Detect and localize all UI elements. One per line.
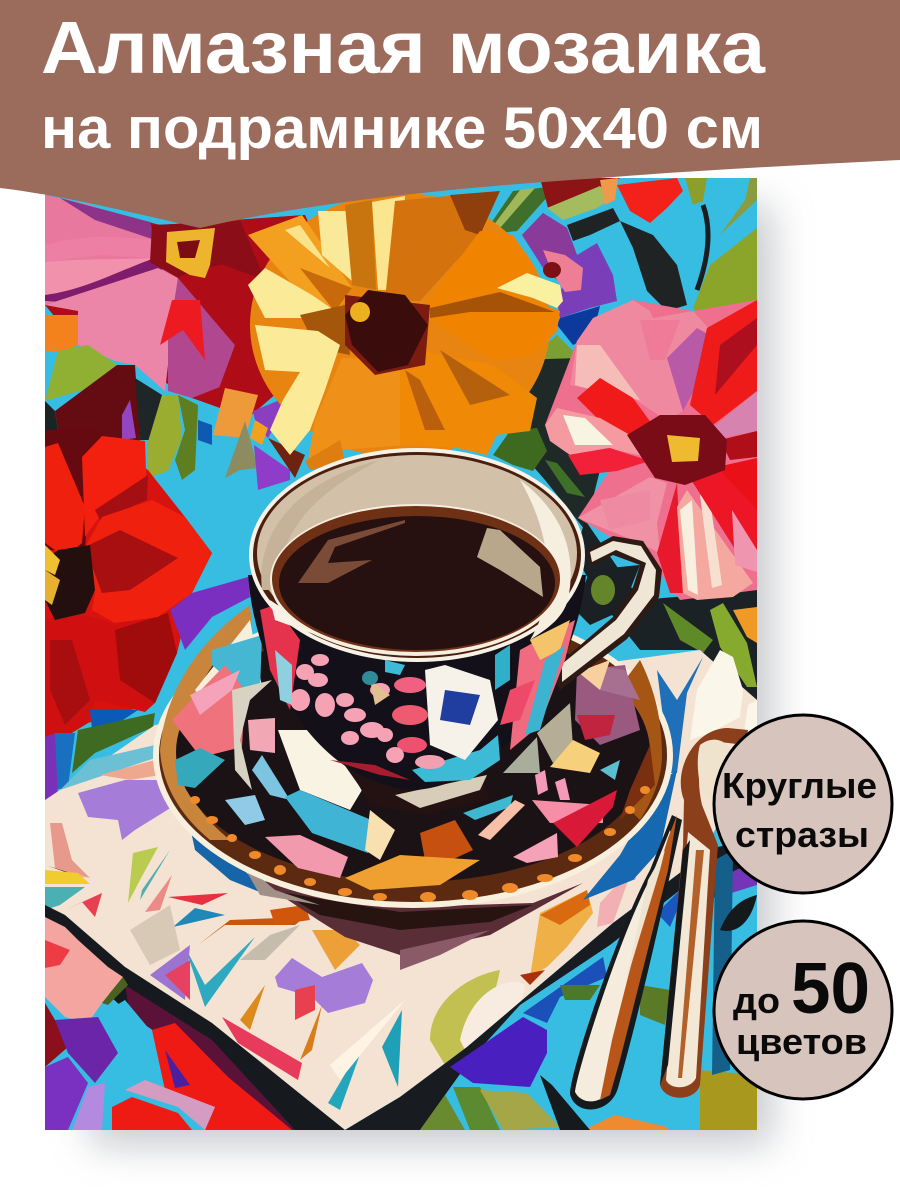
cup rim	[249, 448, 585, 662]
flower: left red	[45, 430, 250, 800]
cup handle	[555, 536, 662, 690]
coffee cup	[248, 448, 662, 815]
back spoon	[660, 728, 748, 1098]
badge: up to 50 colours: цветов	[736, 1021, 867, 1062]
flower: right pink and red	[545, 300, 757, 600]
background foliage, top right	[480, 178, 757, 720]
title: на подрамнике 50х40 см	[41, 96, 763, 161]
header banner	[0, 0, 900, 228]
title	[41, 6, 766, 161]
badge: up to 50 colours: до	[733, 980, 780, 1021]
table behind spoons	[345, 872, 680, 1130]
saucer interior	[176, 651, 650, 881]
badge: round rhinestones: Круглые	[722, 765, 877, 806]
bottom-left flowers and dark table edge	[45, 905, 345, 1130]
front spoon	[570, 815, 682, 1109]
saucer blue underside	[192, 835, 272, 897]
saucer rim	[153, 602, 673, 908]
badge: up to 50 colours: 50	[791, 949, 870, 1029]
flower: top-left pink and crimson	[45, 195, 320, 490]
badge: up to 50 colours	[714, 921, 892, 1099]
badge: round rhinestones: стразы	[735, 814, 869, 855]
cup foot	[350, 770, 490, 815]
rim beads	[190, 786, 650, 902]
saucer	[153, 602, 677, 970]
coffee surface	[270, 504, 562, 656]
title: Алмазная мозаика	[41, 6, 766, 89]
napkin with floral print	[45, 650, 757, 1130]
painting: coffee cup among flowers	[45, 178, 757, 1130]
spoons and table under them	[345, 728, 757, 1130]
cup body	[248, 575, 586, 790]
badge: round rhinestones	[714, 715, 892, 893]
canvas shadow	[90, 205, 772, 1145]
flower: large orange and yellow	[248, 191, 563, 470]
saucer shadow	[258, 880, 583, 955]
